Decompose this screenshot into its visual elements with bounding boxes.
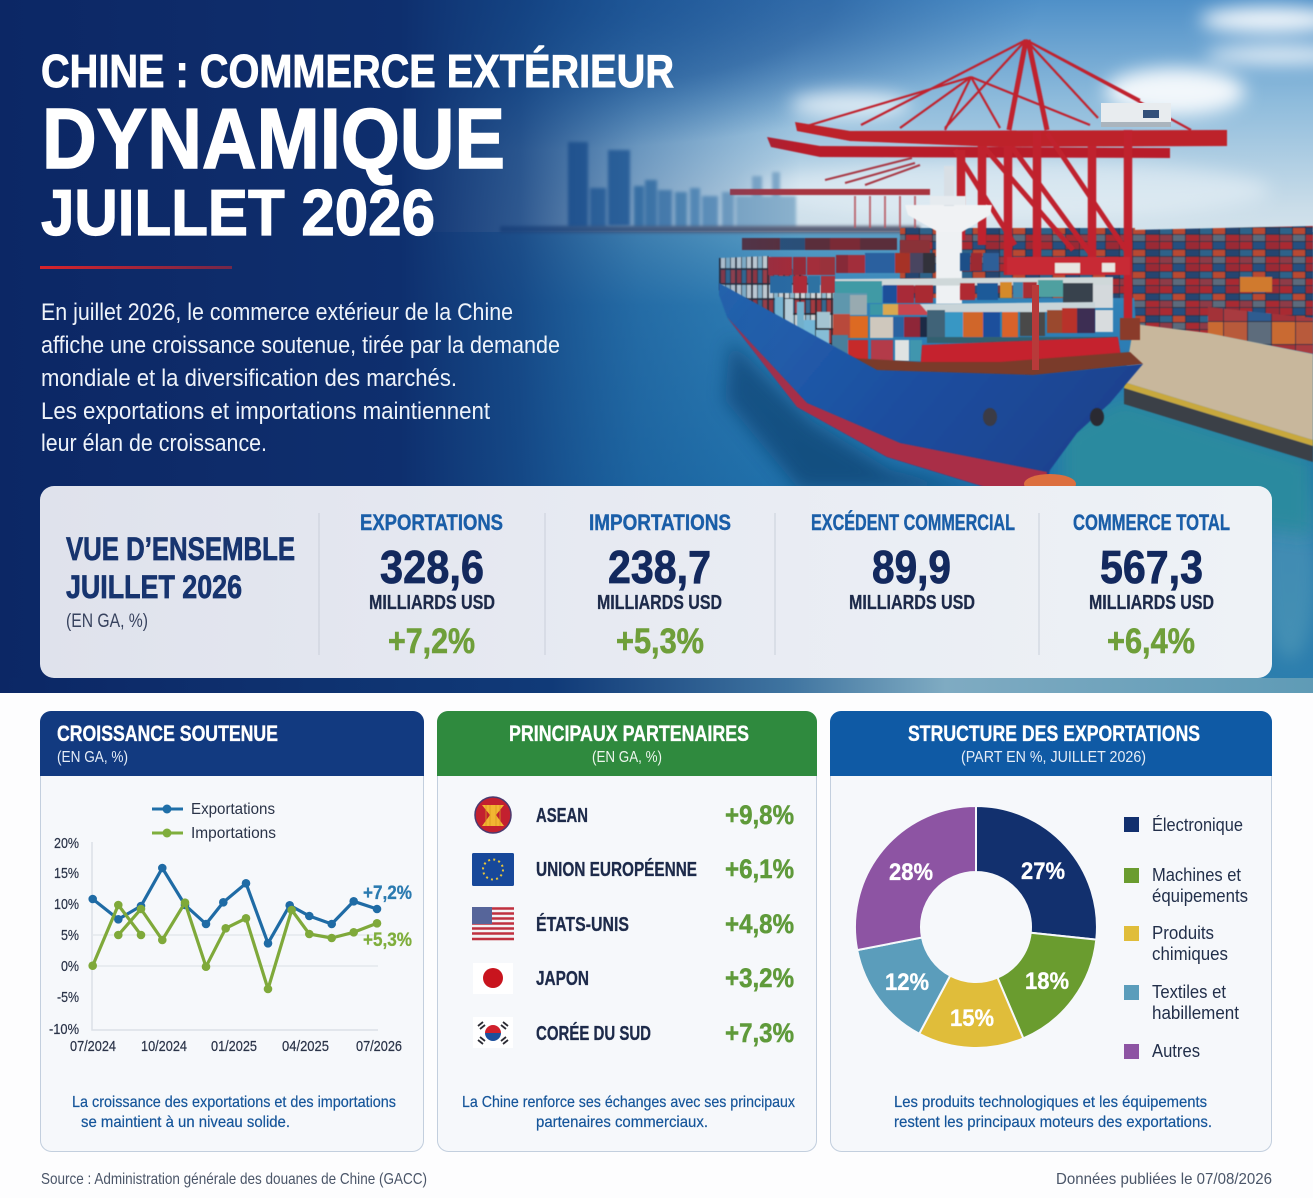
icon: South Korea flag <box>473 1017 513 1048</box>
background port structures behind ship <box>900 228 1135 298</box>
hull shadow on water <box>725 340 985 490</box>
row: Union européenne: +6,1% <box>725 854 794 884</box>
quay <box>1124 324 1313 462</box>
row: États-Unis <box>472 907 794 941</box>
card header <box>437 711 817 776</box>
structure caption: restent les principaux moteurs des exportations. <box>894 1114 1212 1131</box>
stat: exportations <box>360 510 503 661</box>
overview heading: JUILLET 2026 <box>66 569 242 605</box>
cargo: front block top row <box>835 277 1113 332</box>
y axis labels: -10% <box>49 1021 79 1038</box>
rear boom <box>767 137 1170 158</box>
foredeck machinery <box>850 352 1143 376</box>
donut chart: 15% <box>950 1005 994 1032</box>
panel background <box>40 486 1272 678</box>
intro paragraph: En juillet 2026, le commerce extérieur de la Chine <box>41 299 513 326</box>
cargo: upper rear rows <box>768 253 999 293</box>
stat: exportations: MILLIARDS USD <box>369 592 495 614</box>
container ship <box>719 166 1143 494</box>
donut chart <box>855 806 1097 1048</box>
x axis labels: 10/2024 <box>141 1038 187 1055</box>
overview heading: (EN GA, %) <box>66 611 148 632</box>
donut legend <box>1124 815 1248 1061</box>
card header: (PART EN %, JUILLET 2026) <box>961 749 1146 766</box>
card header: STRUCTURE DES EXPORTATIONS <box>908 721 1200 746</box>
importations series <box>88 898 381 993</box>
near-shore teal water <box>1060 396 1313 535</box>
y axis labels: 20% <box>54 835 79 852</box>
stat: importations <box>589 510 731 661</box>
end label exportations: +7,2% <box>363 883 412 904</box>
crane cab <box>1101 103 1171 127</box>
row: Corée du Sud: +7,3% <box>725 1018 794 1048</box>
top sky darkening <box>0 0 1313 245</box>
icon: US flag <box>472 907 514 941</box>
stat: excédent commercial <box>811 510 1015 614</box>
hero banner with port photo scene <box>0 0 1313 693</box>
panel: croissance soutenue <box>40 711 424 1152</box>
stat: excédent commercial: 89,9 <box>872 541 951 593</box>
row: Union européenne: UNION EUROPÉENNE <box>536 858 697 881</box>
title: DYNAMIQUE <box>42 92 505 187</box>
icon: ASEAN emblem <box>475 797 511 833</box>
x axis labels: 07/2024 <box>70 1038 116 1055</box>
card header: (EN GA, %) <box>592 749 662 766</box>
lower background <box>0 693 1313 1198</box>
y axis labels: 15% <box>54 865 79 882</box>
sea <box>0 232 1313 693</box>
card body <box>40 712 424 1152</box>
gantry cranes <box>730 40 1227 340</box>
title: JUILLET 2026 <box>41 176 435 249</box>
rear container row <box>742 238 930 254</box>
y axis labels: -5% <box>57 989 79 1006</box>
chart caption: La croissance des exportations et des importations <box>72 1094 396 1111</box>
intro paragraph <box>41 299 560 457</box>
y axis labels: 10% <box>54 896 79 913</box>
card header: PRINCIPAUX PARTENAIRES <box>509 721 749 746</box>
superstructure tower <box>905 166 992 304</box>
panel: overview <box>40 486 1272 678</box>
card header <box>830 711 1272 776</box>
hull <box>719 283 1143 487</box>
sky <box>0 0 1313 245</box>
stat: importations: 238,7 <box>608 541 711 593</box>
icon: EU flag <box>472 853 514 886</box>
anchor starboard <box>1090 408 1104 426</box>
donut legend: habillement <box>1152 1003 1239 1023</box>
stat: excédent commercial: MILLIARDS USD <box>849 592 975 614</box>
icon: Japan flag <box>473 963 513 994</box>
donut legend: Textiles et <box>1152 982 1226 1002</box>
red boot stripe <box>727 317 1047 487</box>
donut legend: Machines et <box>1152 865 1241 885</box>
x axis labels <box>70 1038 402 1055</box>
row: ASEAN <box>475 797 794 833</box>
overview heading <box>66 531 295 632</box>
bow bulwark <box>920 337 1122 372</box>
stat: commerce total: +6,4% <box>1107 622 1195 661</box>
bow tip <box>1024 474 1076 494</box>
panel: principaux partenaires <box>437 711 817 1152</box>
stat: commerce total: MILLIARDS USD <box>1089 592 1214 614</box>
title <box>41 45 674 249</box>
partners caption: partenaires commerciaux. <box>536 1114 708 1131</box>
donut chart: 18% <box>1025 968 1069 995</box>
chart legend <box>152 801 276 842</box>
far crane <box>730 158 930 228</box>
donut chart: 12% <box>885 969 929 996</box>
x axis labels: 04/2025 <box>282 1038 329 1055</box>
right-side water highlight <box>1262 480 1313 660</box>
navy gradient overlay <box>0 0 800 693</box>
panel: structure des exportations <box>830 711 1272 1152</box>
x axis labels: 07/2026 <box>356 1038 402 1055</box>
structure caption: Les produits technologiques et les équipements <box>894 1094 1207 1111</box>
clouds <box>750 7 1313 220</box>
stat: excédent commercial: EXCÉDENT COMMERCIAL <box>811 510 1015 535</box>
row: États-Unis: ÉTATS-UNIS <box>536 913 629 936</box>
donut chart: 28% <box>889 859 933 886</box>
chart caption: se maintient à un niveau solide. <box>81 1114 290 1131</box>
stat: importations: IMPORTATIONS <box>589 510 731 535</box>
donut legend: chimiques <box>1152 944 1228 964</box>
overview heading: VUE D’ENSEMBLE <box>66 531 295 567</box>
row: ASEAN: ASEAN <box>536 805 588 827</box>
crane foot <box>1120 318 1140 340</box>
intro paragraph: affiche une croissance soutenue, tirée par la demande <box>41 332 560 359</box>
donut legend: Produits <box>1152 923 1214 943</box>
chart legend: Exportations <box>191 801 275 818</box>
exportations series <box>88 864 381 948</box>
donut legend: Électronique <box>1152 815 1243 835</box>
y axis labels: 5% <box>61 927 79 944</box>
stat: exportations: +7,2% <box>388 622 475 661</box>
title: CHINE : COMMERCE EXTÉRIEUR <box>41 45 674 97</box>
partners caption: La Chine renforce ses échanges avec ses principaux <box>462 1094 795 1111</box>
card header: (EN GA, %) <box>57 749 128 766</box>
row: Japon: +3,2% <box>725 963 794 993</box>
footer date: Données publiées le 07/08/2026 <box>1056 1171 1272 1188</box>
cables <box>800 40 1191 130</box>
container yard <box>1130 226 1313 354</box>
chart legend: Importations <box>191 825 276 842</box>
stat: importations: +5,3% <box>616 622 704 661</box>
stat: exportations: 328,6 <box>380 541 484 593</box>
intro paragraph: mondiale et la diversification des marchés. <box>41 365 457 392</box>
cargo: lower row <box>832 335 922 363</box>
legs <box>961 130 1128 338</box>
row: Corée du Sud <box>473 1017 794 1048</box>
stat: importations: MILLIARDS USD <box>597 592 722 614</box>
donut legend: équipements <box>1152 886 1248 906</box>
card header: CROISSANCE SOUTENUE <box>57 721 278 746</box>
anchor port <box>983 408 997 426</box>
card header <box>40 711 424 776</box>
stat: exportations: EXPORTATIONS <box>360 510 503 535</box>
structure caption <box>894 1094 1212 1131</box>
crane sill beam <box>1007 257 1130 275</box>
row: Japon: JAPON <box>536 968 589 990</box>
y axis labels: 0% <box>61 958 79 975</box>
row: Corée du Sud: CORÉE DU SUD <box>536 1022 651 1045</box>
donut legend: Autres <box>1152 1041 1200 1061</box>
donut chart: 27% <box>1021 858 1065 885</box>
card body <box>438 712 816 1152</box>
distant skyline left <box>568 142 796 228</box>
row: ASEAN: +9,8% <box>725 800 794 830</box>
footer source: Source : Administration générale des douanes de Chine (GACC) <box>41 1171 427 1188</box>
end label importations: +5,3% <box>363 930 412 951</box>
line chart <box>49 801 412 1055</box>
cargo: side face <box>719 256 850 378</box>
foremast <box>1032 285 1039 370</box>
intro paragraph: Les exportations et importations maintiennent <box>41 398 490 425</box>
front boom <box>795 122 1227 147</box>
card body <box>830 712 1272 1152</box>
band below overview panel <box>0 678 1313 693</box>
stat: commerce total: 567,3 <box>1100 541 1203 593</box>
y axis labels <box>49 835 79 1038</box>
dockside band on horizon <box>500 226 920 233</box>
intro paragraph: leur élan de croissance. <box>41 430 267 457</box>
cargo: middle row <box>833 293 1117 343</box>
stat: commerce total: COMMERCE TOTAL <box>1073 510 1230 535</box>
row: Union européenne <box>472 853 794 886</box>
row: États-Unis: +4,8% <box>725 909 794 939</box>
title underline <box>40 266 232 269</box>
stat: commerce total <box>1073 510 1230 661</box>
chart caption <box>72 1094 396 1131</box>
x axis labels: 01/2025 <box>211 1038 257 1055</box>
partners caption <box>462 1094 795 1131</box>
row: Japon <box>473 963 794 994</box>
